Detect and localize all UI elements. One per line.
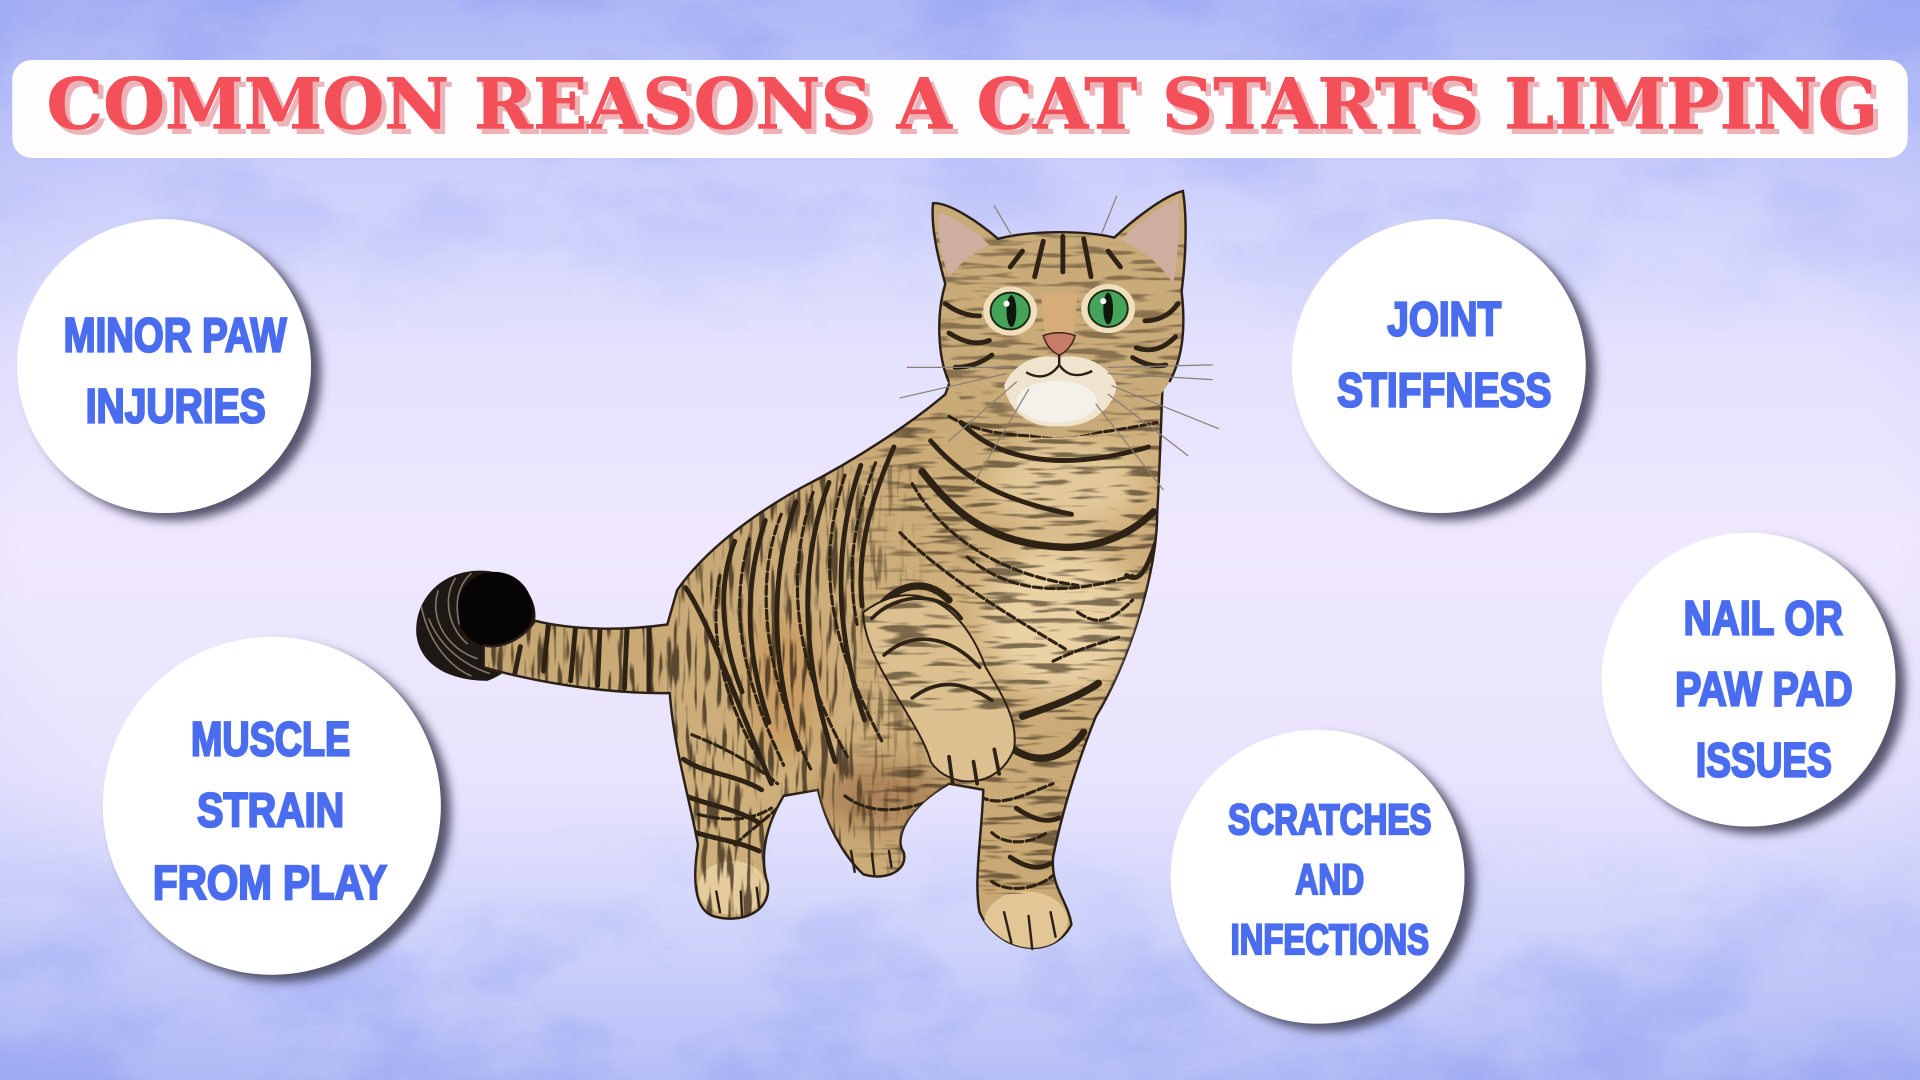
- cat toes: [716, 851, 1056, 949]
- callout: minor paw injuries: MINOR PAW: [64, 309, 287, 362]
- callout: nail or paw pad issues: ISSUES: [1696, 734, 1832, 787]
- cat raised paw: [862, 594, 1016, 786]
- callout: joint stiffness: JOINT: [1387, 294, 1501, 347]
- callout: nail or paw pad issues: NAIL OR: [1684, 592, 1843, 645]
- illustration: tabby cat with raised paw: [416, 191, 1218, 950]
- callout: minor paw injuries: INJURIES: [86, 380, 266, 433]
- fur streak texture: [484, 465, 931, 918]
- cat ears inner: [938, 198, 1179, 284]
- callout: minor paw injuries: [17, 219, 311, 513]
- title heading: COMMON REASONS A CAT STARTS LIMPING: [47, 64, 1878, 146]
- title banner: [12, 60, 1908, 158]
- callout: scratches and infections: AND: [1296, 856, 1364, 904]
- callout: muscle strain from play: [103, 637, 441, 975]
- callout: muscle strain from play: STRAIN: [197, 785, 344, 838]
- callout: joint stiffness: [1292, 219, 1586, 513]
- cat eyes: [983, 284, 1135, 336]
- cat face stripes: [945, 236, 1178, 367]
- cat whiskers: [900, 196, 1218, 490]
- callout: scratches and infections: SCRATCHES: [1228, 796, 1431, 844]
- callout: joint stiffness: STIFFNESS: [1337, 365, 1551, 418]
- callout: scratches and infections: INFECTIONS: [1231, 916, 1429, 964]
- cat body: [484, 191, 1218, 950]
- callout: muscle strain from play: MUSCLE: [191, 714, 350, 767]
- callout: scratches and infections: [1171, 730, 1464, 1024]
- stripes: [514, 416, 1157, 888]
- callout: nail or paw pad issues: PAW PAD: [1675, 663, 1853, 716]
- cat muzzle: [1004, 356, 1117, 426]
- cat nose and mouth: [1043, 333, 1075, 355]
- cat head: [931, 191, 1188, 441]
- cat tail tuft: [416, 571, 535, 681]
- callout: muscle strain from play: FROM PLAY: [153, 857, 387, 910]
- callout: nail or paw pad issues: [1602, 533, 1896, 827]
- title heading: COMMON REASONS A CAT STARTS LIMPING: [51, 68, 1883, 150]
